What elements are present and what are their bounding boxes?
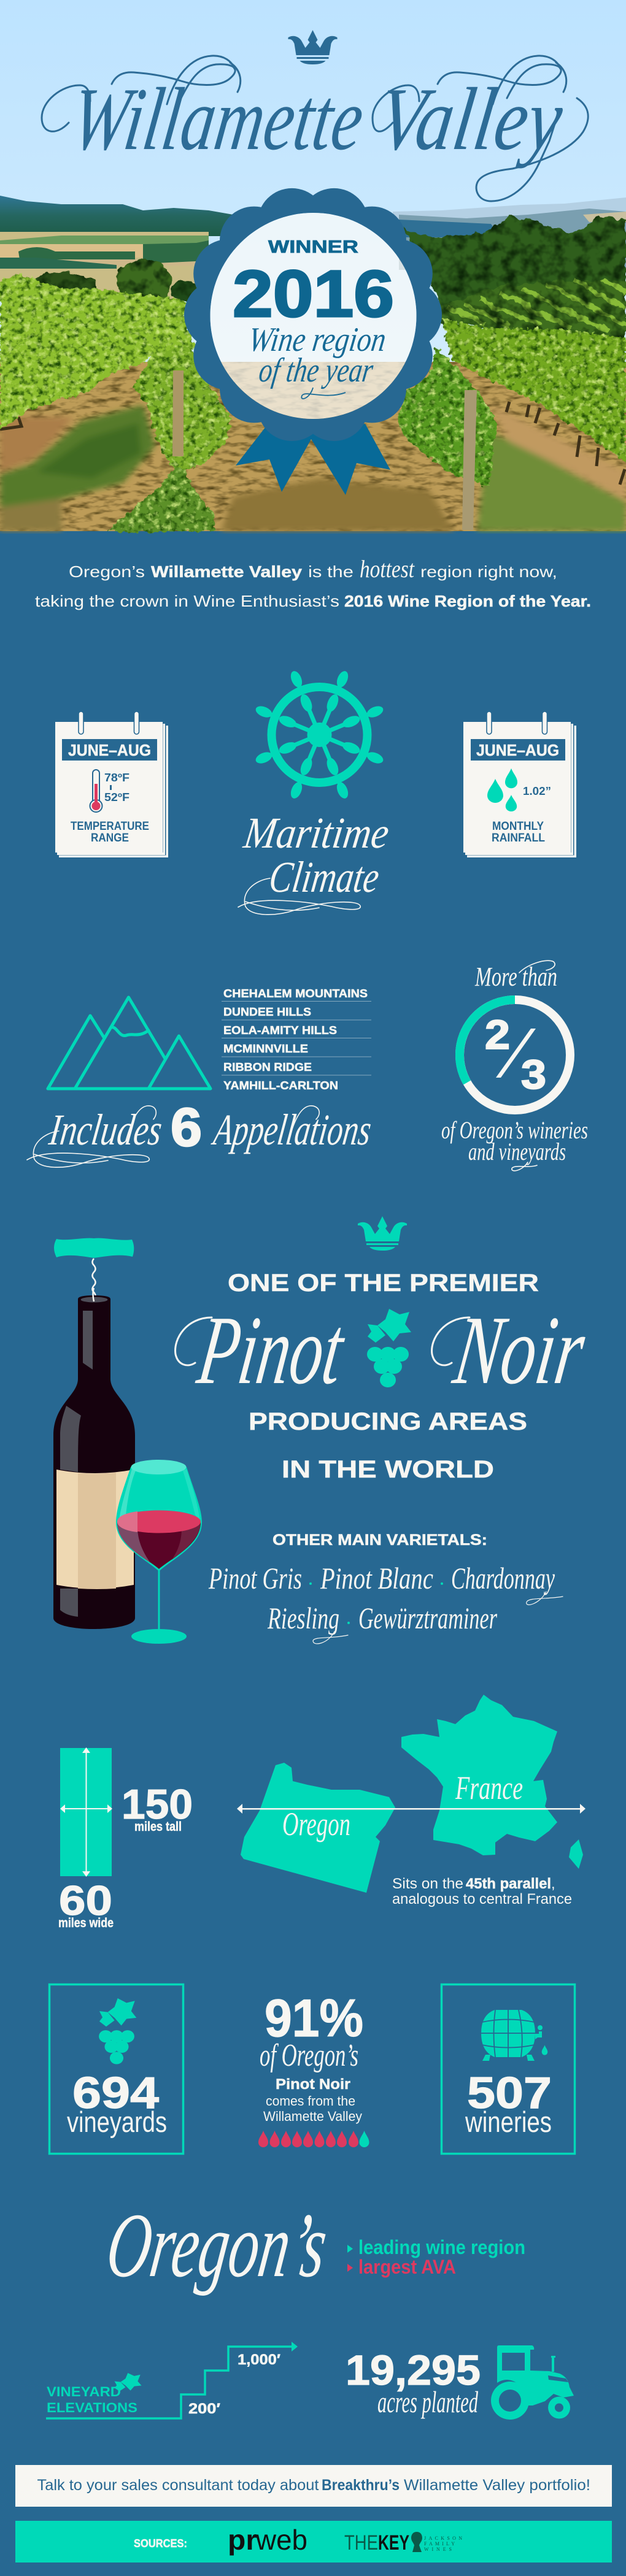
list: appellations: MCMINNVILLE — [223, 1043, 308, 1055]
panel: rainfall calendar: JUNE–AUG — [476, 741, 559, 759]
list: appellations: DUNDEE HILLS — [223, 1006, 311, 1018]
icon: wine barrel — [481, 2010, 547, 2061]
title: Willamette Valley: Valley — [373, 69, 569, 169]
map: Corsica — [569, 1839, 583, 1869]
logo: The Key — [344, 2531, 462, 2555]
panel: valley size rectangle: 60 — [59, 1877, 112, 1924]
heading: Includes 6 Appellations — [27, 1097, 374, 1167]
ground — [0, 362, 626, 531]
bottle label — [56, 1470, 134, 1589]
logo: The Key: WINES — [424, 2547, 452, 2552]
icon: ship wheel — [254, 669, 385, 800]
panel: vineyards stat: 694 — [72, 2069, 159, 2118]
text: 45th parallel note: 45th parallel — [466, 1876, 551, 1892]
panel: valley size rectangle: miles wide — [58, 1916, 114, 1930]
icon: teal crown — [358, 1216, 407, 1251]
intro text: is the — [308, 562, 354, 581]
chart: vineyard elevations steps: ELEVATIONS — [47, 2400, 137, 2415]
logo: prweb: web — [255, 2524, 307, 2556]
list: other main varietals: Gewürztraminer — [358, 1601, 497, 1635]
logo: prweb: pr — [228, 2524, 257, 2556]
centre foreground vine — [133, 343, 231, 470]
calendar rings — [487, 711, 547, 734]
text: 45th parallel note — [392, 1876, 572, 1907]
left trees — [29, 259, 200, 303]
badge text: Wine region — [246, 321, 388, 359]
heading: Maritime Climate — [238, 808, 392, 914]
heading: Oregon's leading region: Oregon’s — [101, 2195, 333, 2296]
red bullet: largest AVA — [358, 2256, 456, 2278]
logo: The Key: FAMILY — [424, 2541, 455, 2547]
list: appellations — [222, 987, 371, 1092]
panel: wineries stat — [442, 1985, 574, 2154]
trunks — [0, 402, 625, 485]
heading: premier pinot noir: PRODUCING AREAS — [249, 1408, 527, 1435]
intro text: hottest — [360, 555, 415, 583]
right tree mass — [403, 216, 626, 325]
stat: 91 percent: of Oregon’s — [260, 2038, 358, 2073]
map labels — [282, 1769, 523, 1842]
list: other main varietals: OTHER MAIN VARIETALS: — [272, 1531, 487, 1549]
list: appellations: YAMHILL-CARLTON — [223, 1079, 338, 1092]
icon: blue crown — [288, 30, 338, 64]
panel: temperature calendar: JUNE–AUG — [68, 741, 151, 759]
corkscrew — [54, 1238, 134, 1299]
vine posts — [172, 370, 184, 456]
icon: tractor — [491, 2345, 574, 2420]
icon: badge ribbon tails — [236, 422, 390, 495]
icon: grape cluster — [99, 1998, 136, 2064]
panel: temperature calendar: RANGE — [91, 832, 129, 845]
callout: sales consultant bar: Willamette Valley portfolio! — [404, 2477, 590, 2494]
list: appellations: EOLA-AMITY HILLS — [223, 1024, 337, 1037]
chart: two thirds ring: and vineyards — [468, 1138, 566, 1165]
map: Oregon — [241, 1763, 395, 1893]
panel: rainfall calendar — [463, 711, 576, 857]
panel: temperature calendar: 78ºF — [104, 772, 129, 784]
heading: premier pinot noir: IN THE WORLD — [282, 1456, 494, 1483]
heading: Maritime Climate: Climate — [266, 853, 382, 902]
panel: vineyards stat: vineyards — [67, 2106, 167, 2138]
intro text — [35, 555, 591, 610]
left vineyard mass — [0, 274, 195, 429]
list: other main varietals: Chardonnay — [451, 1561, 555, 1595]
text: 45th parallel note: , — [551, 1876, 555, 1892]
chart: vineyard elevations steps: VINEYARD — [47, 2384, 121, 2399]
badge text: 2016 — [233, 256, 394, 331]
intro text: taking the crown in Wine Enthusiast’s — [35, 592, 339, 610]
panel: wineries stat: wineries — [465, 2106, 552, 2138]
stat: 91 percent: Willamette Valley — [263, 2109, 362, 2124]
text: 45th parallel note: analogous to central France — [392, 1891, 572, 1907]
callout: sales consultant bar: Talk to your sales consultant today about — [37, 2477, 319, 2494]
badge text: of the year — [257, 351, 376, 389]
title: Willamette Valley: Willamette — [66, 69, 369, 169]
chart: vineyard elevations steps: 200′ — [188, 2401, 220, 2417]
icon: mountains — [48, 997, 211, 1089]
distant right hills — [393, 197, 626, 251]
panel: valley size rectangle — [58, 1747, 193, 1930]
drops row — [258, 2131, 369, 2147]
panel: wineries stat: 507 — [467, 2069, 552, 2118]
panel: hero vineyard landscape — [0, 0, 626, 531]
icon: thermometer — [90, 770, 102, 812]
heading: premier pinot noir: Pinot — [191, 1296, 351, 1405]
badge text: WINNER — [268, 237, 358, 257]
heading: Maritime Climate: Maritime — [241, 808, 392, 857]
map labels: Oregon — [282, 1806, 350, 1842]
panel: sources bar — [15, 2521, 612, 2563]
badge: scalloped seal — [184, 188, 442, 441]
left fields — [0, 232, 209, 301]
icon: rain drops — [487, 769, 517, 811]
illustration: wine bottle and corkscrew — [53, 1238, 135, 1629]
stat: acres planted: 19,295 — [346, 2347, 481, 2394]
list: other main varietals — [208, 1531, 563, 1644]
heading: premier pinot noir — [176, 1270, 592, 1483]
right foreground vine — [397, 347, 497, 487]
chart: vineyard elevations steps: 1,000′ — [238, 2352, 280, 2368]
panel: temperature calendar: 52ºF — [104, 791, 129, 803]
badge text — [233, 237, 394, 399]
title swashes — [42, 56, 588, 201]
teal bullet: leading wine region — [358, 2236, 525, 2258]
map: France — [401, 1695, 557, 1855]
map labels: France — [455, 1769, 523, 1806]
panel: temperature calendar: TEMPERATURE — [71, 820, 149, 833]
heading: Includes 6 Appellations: 6 — [171, 1097, 202, 1157]
intro text: region right now, — [420, 562, 557, 581]
list: other main varietals: Riesling — [267, 1601, 339, 1635]
heading: Includes 6 Appellations: Appellations — [209, 1105, 374, 1154]
heading: Includes 6 Appellations: Includes — [46, 1105, 165, 1154]
chart: two thirds ring — [441, 960, 588, 1171]
list: other main varietals: Pinot Blanc — [320, 1561, 433, 1595]
panel: vineyards stat — [49, 1985, 183, 2154]
stat: 91 percent: 91% — [265, 1989, 363, 2048]
logo: prweb — [228, 2524, 307, 2556]
heading: premier pinot noir: ONE OF THE PREMIER — [228, 1270, 539, 1297]
chart: two thirds ring: 2 — [485, 1012, 510, 1058]
callout: sales consultant bar: Breakthru’s — [322, 2477, 400, 2494]
chart: vineyard elevations steps — [46, 2342, 298, 2418]
right vineyard mass — [442, 319, 626, 463]
logo: The Key: JACKSON — [424, 2536, 462, 2541]
intro text: Willamette Valley — [151, 562, 303, 581]
panel: rainfall calendar: MONTHLY — [492, 820, 544, 833]
panel: valley size rectangle: 150 — [122, 1781, 193, 1828]
stat: acres planted — [346, 2347, 481, 2419]
arrow: 45th parallel — [237, 1804, 585, 1814]
list: other main varietals: Pinot Gris — [208, 1561, 302, 1595]
dimension arrows — [60, 1747, 112, 1877]
stat: 91 percent: Pinot Noir — [276, 2076, 350, 2093]
icon: grape cluster — [367, 1309, 411, 1387]
intro text: 2016 Wine Region of the Year. — [344, 592, 591, 610]
panel: sources bar: SOURCES: — [134, 2537, 187, 2550]
illustration: wine glass — [116, 1460, 202, 1644]
title: Willamette Valley — [42, 56, 588, 201]
list: appellations: RIBBON RIDGE — [223, 1061, 312, 1073]
stat: acres planted: acres planted — [377, 2385, 479, 2419]
stat: 91 percent: comes from the — [266, 2093, 355, 2109]
intro text: Oregon’s — [69, 562, 145, 581]
logo: The Key: THE — [344, 2531, 378, 2555]
text: 45th parallel note: Sits on the — [392, 1876, 463, 1892]
panel: temperature calendar — [55, 711, 168, 857]
left forest hills — [0, 196, 233, 236]
chart: two thirds ring: 3 — [521, 1052, 546, 1098]
list: appellations: CHEHALEM MOUNTAINS — [223, 987, 368, 1000]
panel: rainfall calendar: 1.02” — [523, 785, 551, 797]
calendar rings — [79, 711, 139, 734]
callout: sales consultant bar — [15, 2465, 612, 2507]
chart: two thirds ring: More than — [474, 962, 557, 992]
panel: valley size rectangle: miles tall — [134, 1820, 182, 1834]
panel: rainfall calendar: RAINFALL — [492, 832, 545, 845]
upper right vine rows — [437, 279, 626, 343]
wine — [117, 1522, 201, 1569]
logo: The Key: KEY — [378, 2531, 409, 2555]
stat: 91 percent — [258, 1989, 369, 2147]
